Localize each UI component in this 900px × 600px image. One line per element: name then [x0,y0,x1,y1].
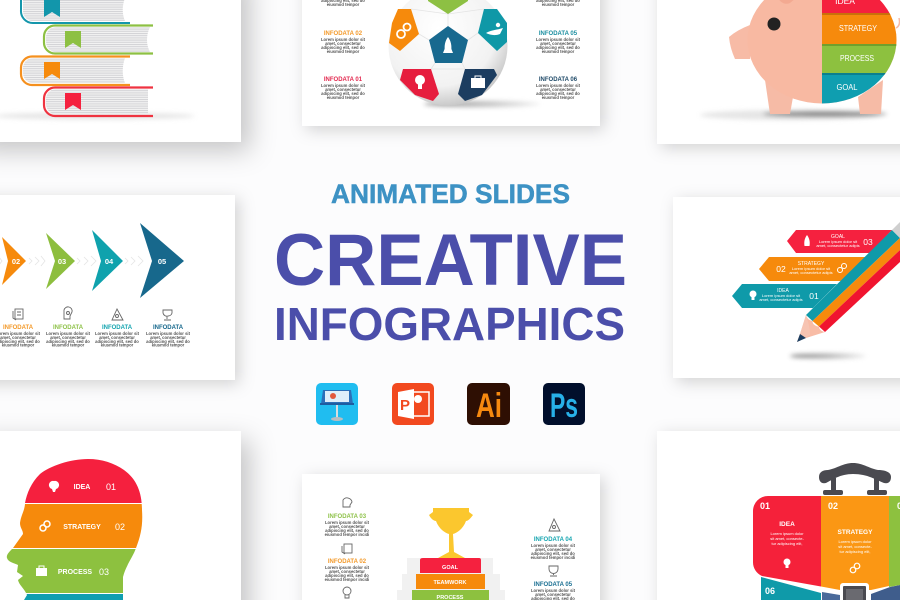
text: infodata top right: eiusmod tempor [542,2,575,7]
case: red section [753,496,821,586]
tag: strategy: STRATEGY [798,261,825,267]
icon: keynote [316,383,358,425]
panel: soccer ball [302,0,600,126]
text: infodata green: amet, consectetur [50,335,86,340]
icon: triangle [549,519,560,531]
text: infodata 04: INFODATA 04 [534,537,573,543]
case: orange section [821,496,889,590]
text: infodata 03 [325,514,370,537]
panel: briefcase [657,431,900,600]
step: goal [420,558,481,573]
text: infodata 06 [536,77,581,100]
text: infodata 05: eiusmod tempor [542,49,575,54]
pentagon: teal hand [478,9,507,51]
text: infodata 02: amet, consectetur [329,569,365,574]
step: goal: GOAL [442,565,459,571]
title: infographics: INFOGRAPHICS [274,298,625,350]
text: infodata 04: Lorem ipsum dolor sit [531,543,576,548]
case: green section [889,496,900,587]
text: infodata orange: INFODATA [3,325,34,331]
text: infodata 05: INFODATA 05 [534,582,573,588]
head row: idea: IDEA [74,484,90,491]
icon: head [64,307,72,319]
icon: document [13,309,23,320]
icon: bulb [343,587,351,598]
text: infodata 01: amet, consectetur [325,87,361,92]
text: infodata 03: adipiscing elit, sed do [325,528,369,533]
pentagon: orange gears [389,9,419,51]
case: blue section [822,592,840,600]
text: infodata blue: INFODATA [153,325,184,331]
text: infodata 04: adipiscing elit, sed do [531,551,575,556]
pig labels: GOAL [836,82,858,92]
text: infodata teal: amet, consectetur [99,335,135,340]
text: infodata 06: INFODATA 06 [539,77,578,83]
text: infodata orange: amet, consectetur [0,335,36,340]
panel: piggy bank [657,0,900,144]
book: teal [21,0,130,23]
text: infodata 05: amet, consectetur [540,41,576,46]
text: infodata 02: eiusmod tempor incidi [325,577,369,582]
head row: idea: 01 [106,482,116,492]
grey steps [397,558,505,600]
arrow 02 [2,237,26,285]
arrow 03 [46,233,75,289]
text: infodata teal: Lorem ipsum dolor sit [95,331,140,336]
book shadow [0,112,195,120]
text: infodata 02: Lorem ipsum dolor sit [325,565,370,570]
text: infodata 01: adipiscing elit, sed do [321,91,365,96]
pentagon: navy briefcase [458,69,497,101]
tag: idea: 01 [809,291,819,301]
tag: idea: amet, consectetur adipis [759,297,803,302]
tag: idea [732,284,837,308]
text: infodata 02: Lorem ipsum dolor sit [321,37,366,42]
pencil shadow [790,354,866,358]
step: process [412,590,489,600]
text: infodata orange [0,325,41,348]
case: navy section [871,585,900,600]
arrow 05 [140,223,184,298]
tag: strategy: Lorem ipsum dolor sit [792,266,831,271]
pentagon: blue rocket [429,26,468,63]
text: infodata 06: eiusmod tempor [542,95,575,100]
ball shadow [424,101,540,107]
arrow 02: 02 [12,257,20,266]
text: infodata blue: amet, consectetur [150,335,186,340]
text: infodata 05: Lorem ipsum dolor sit [536,37,581,42]
book: red [44,88,153,116]
text: infodata blue: Lorem ipsum dolor sit [146,331,191,336]
case: red section: Lorem ipsum dolor [770,531,804,536]
head row: idea [49,481,116,492]
icon: triangle [112,309,123,320]
tag: goal: GOAL [831,234,845,240]
arrow 03: 03 [58,257,66,266]
head row: strategy: 02 [115,522,125,532]
case: teal section: 06 [765,586,775,596]
text: infodata 01 [321,77,366,100]
text: infodata 02 [321,31,366,54]
tag: idea: Lorem ipsum dolor sit [762,293,801,298]
case: lock [840,583,869,600]
text: infodata 02: INFODATA 02 [328,559,367,565]
pig shadow [700,110,887,120]
text: infodata 04: amet, consectetur [535,547,571,552]
text: infodata teal: adipiscing elit, sed do [95,339,139,344]
text: infodata 01: Lorem ipsum dolor sit [321,83,366,88]
text: infodata green [46,325,91,348]
icon: powerpoint: P [400,397,410,414]
tag: strategy: amet, consectetur adipis [789,270,833,275]
tag: idea: IDEA [777,288,789,294]
tag: strategy [759,257,865,281]
text: infodata 03: Lorem ipsum dolor sit [325,520,370,525]
case: red section: tur adipiscing elit, [772,541,802,546]
tag: goal: Lorem ipsum dolor sit [819,239,858,244]
icon: trophy [549,566,558,576]
case: orange section: STRATEGY [838,529,873,536]
panel: head [0,431,241,600]
step: teamwork: TEAMWORK [434,580,467,586]
briefcase handle [819,463,891,495]
panel: book stack [0,0,241,142]
tag: strategy: 02 [776,264,786,274]
panel: trophy [302,474,600,600]
book: green [44,26,153,54]
text: infodata 05: adipiscing elit, sed do [536,45,580,50]
text: infodata blue: adipiscing elit, sed do [146,339,190,344]
book: orange [21,56,130,85]
icon: head [343,498,352,507]
text: infodata 02: eiusmod tempor [327,49,360,54]
text: infodata 04 [531,537,576,560]
case: orange section: sit amet, consecte- [838,544,872,549]
text: infodata 05 [536,31,581,54]
case: red section: IDEA [779,521,795,528]
text: infodata 01: eiusmod tempor [327,95,360,100]
text: infodata 05 [531,582,576,600]
tag: goal [787,230,892,253]
text: infodata top left: eiusmod tempor [327,2,360,7]
text: infodata orange: eiusmod tempor [2,342,35,348]
pig eye [768,18,780,30]
text: infodata 05: INFODATA 05 [539,31,578,37]
case: red section: sit amet, consecte- [770,536,804,541]
pentagon: green top [428,0,468,14]
text: infodata 03: INFODATA 03 [328,514,367,520]
text: infodata 06: Lorem ipsum dolor sit [536,83,581,88]
head row: strategy: STRATEGY [63,524,101,531]
head bands [6,459,142,600]
text: infodata green: eiusmod tempor [52,342,85,348]
case: red section: 01 [760,501,770,511]
subtitle: ANIMATED SLIDES [331,179,570,209]
text: infodata 06: amet, consectetur [540,87,576,92]
text: infodata 02: adipiscing elit, sed do [321,45,365,50]
text: infodata 01: INFODATA 01 [324,77,363,83]
pig labels [835,0,877,92]
case: orange section: tur adipiscing elit, [840,549,870,554]
icon: document [342,544,352,554]
pig colour bands [822,0,900,105]
arrow 04 [92,230,123,291]
text: infodata blue: eiusmod tempor [152,342,185,348]
text: infodata 06: adipiscing elit, sed do [536,91,580,96]
case: orange section: Lorem ipsum dolor [838,539,872,544]
panel: pencil [673,197,900,378]
text: infodata 03: amet, consectetur [329,524,365,529]
text: infodata teal: INFODATA [102,325,133,331]
tag: goal: amet, consectetur adipis [816,243,860,248]
head row: strategy [40,521,125,532]
tag: goal: 03 [863,237,873,247]
pencil [797,222,900,342]
case: orange section: 02 [828,501,838,511]
arrow 05: 05 [158,257,166,266]
pentagon: red bulb [400,69,439,101]
pig body [729,0,900,114]
text: infodata 05: Lorem ipsum dolor sit [531,588,576,593]
icon: photoshop: Ps [550,387,578,425]
pig labels: STRATEGY [839,23,877,33]
text: infodata 02 [325,559,370,582]
trophy [429,508,473,558]
arrow 04: 04 [105,257,114,266]
title: creative: CREATIVE [274,220,627,301]
icon: trophy [163,310,172,320]
text: infodata 05: amet, consectetur [535,592,571,597]
ball [388,0,508,106]
pig labels: PROCESS [840,53,874,63]
text: infodata green: Lorem ipsum dolor sit [46,331,91,336]
text: infodata 04: eiusmod tempor incidi [531,555,575,560]
text: infodata 02: INFODATA 02 [324,31,363,37]
text: infodata 03: eiusmod tempor incidi [325,532,369,537]
icon: powerpoint [392,383,434,425]
case: teal section [761,577,821,600]
text: infodata 02: amet, consectetur [325,41,361,46]
text: infodata 02: adipiscing elit, sed do [325,573,369,578]
panel: arrows [0,195,235,380]
text: infodata green: adipiscing elit, sed do [46,339,90,344]
text: infodata teal: eiusmod tempor [101,342,134,348]
head row: process: 03 [99,567,109,577]
text: infodata top left [321,0,365,7]
text: infodata blue [146,325,191,348]
chevrons between arrows [0,256,143,266]
head row: process: PROCESS [58,569,92,576]
step: teamwork [416,574,485,589]
icon: illustrator: Ai [476,387,502,425]
text: infodata teal [95,325,140,348]
text: infodata green: INFODATA [53,325,84,331]
icon: photoshop [543,383,585,425]
head row: process [36,566,109,577]
text: infodata top right [536,0,580,7]
